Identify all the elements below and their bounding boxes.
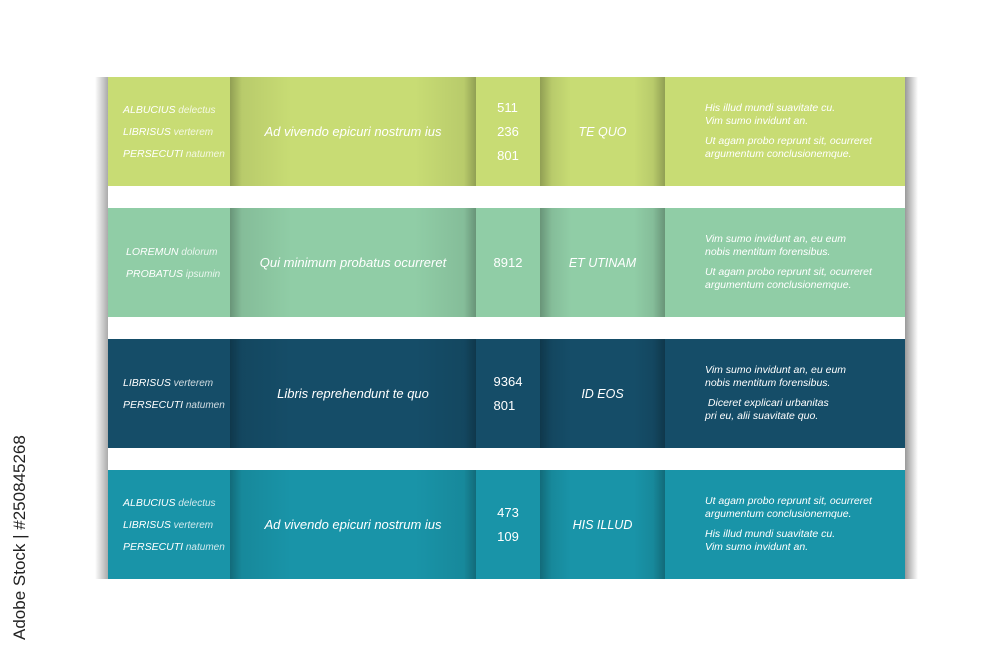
row 3 bbox=[108, 339, 905, 448]
left shadow strip bbox=[95, 77, 108, 579]
row 4 bbox=[108, 470, 905, 579]
tag: ET UTINAM bbox=[569, 256, 636, 270]
description bbox=[705, 494, 872, 553]
tag bbox=[540, 208, 665, 317]
description: pri eu, alii suavitate quo. bbox=[705, 410, 818, 422]
title bbox=[230, 339, 476, 448]
tag: TE QUO bbox=[579, 124, 626, 138]
tag bbox=[540, 470, 665, 579]
description: nobis mentitum forensibus. bbox=[705, 246, 830, 258]
numbers: 109 bbox=[497, 528, 519, 544]
description: argumentum conclusionemque. bbox=[705, 279, 852, 291]
labels bbox=[122, 496, 225, 552]
labels: PROBATUS ipsumin bbox=[126, 268, 220, 280]
description: Ut agam probo reprunt sit, ocurreret bbox=[705, 134, 872, 146]
description bbox=[705, 102, 872, 160]
labels bbox=[123, 376, 225, 410]
labels: PERSECUTI natumen bbox=[123, 148, 225, 160]
numbers: 801 bbox=[497, 148, 519, 162]
description: Vim sumo invidunt an, eu eum bbox=[705, 232, 846, 244]
labels: PERSECUTI natumen bbox=[123, 398, 225, 410]
description: argumentum conclusionemque. bbox=[705, 148, 852, 160]
description: Ut agam probo reprunt sit, ocurreret bbox=[705, 266, 872, 278]
labels: LOREMUN dolorum bbox=[126, 246, 217, 258]
numbers bbox=[497, 100, 519, 162]
labels: ALBUCIUS delectus bbox=[123, 496, 216, 508]
description: His illud mundi suavitate cu. bbox=[705, 528, 835, 540]
description: Diceret explicari urbanitas bbox=[708, 396, 829, 408]
labels: PERSECUTI natumen bbox=[123, 540, 225, 552]
labels bbox=[122, 104, 225, 160]
tag: ID EOS bbox=[581, 386, 624, 400]
labels: LIBRISUS verterem bbox=[123, 518, 213, 530]
title: Libris reprehendunt te quo bbox=[277, 386, 429, 401]
description: argumentum conclusionemque. bbox=[705, 508, 852, 520]
title bbox=[230, 470, 476, 579]
vertical stock credit: Adobe Stock | #250845268 bbox=[10, 435, 29, 640]
description: nobis mentitum forensibus. bbox=[705, 377, 830, 389]
description: Vim sumo invidunt an. bbox=[705, 541, 808, 553]
labels: LIBRISUS verterem bbox=[123, 126, 213, 138]
row 2 bbox=[108, 208, 905, 317]
description: Vim sumo invidunt an. bbox=[705, 115, 808, 127]
description: Vim sumo invidunt an, eu eum bbox=[705, 364, 846, 376]
description bbox=[704, 364, 846, 422]
description: Ut agam probo reprunt sit, ocurreret bbox=[705, 494, 872, 506]
description: His illud mundi suavitate cu. bbox=[705, 102, 835, 114]
labels: LIBRISUS verterem bbox=[123, 376, 213, 388]
title: Ad vivendo epicuri nostrum ius bbox=[264, 124, 442, 139]
title: Ad vivendo epicuri nostrum ius bbox=[264, 517, 442, 532]
tag: HIS ILLUD bbox=[573, 518, 632, 532]
right shadow strip bbox=[905, 77, 918, 579]
numbers bbox=[494, 374, 522, 412]
numbers bbox=[497, 504, 519, 544]
labels: ALBUCIUS delectus bbox=[123, 104, 216, 116]
numbers: 511 bbox=[497, 100, 518, 114]
numbers: 473 bbox=[497, 504, 519, 520]
numbers: 801 bbox=[494, 398, 515, 412]
title bbox=[230, 208, 476, 317]
tag bbox=[540, 339, 665, 448]
title bbox=[230, 77, 476, 186]
row 1 bbox=[108, 77, 905, 186]
title: Qui minimum probatus ocurreret bbox=[260, 255, 446, 270]
description bbox=[705, 232, 872, 291]
numbers: 236 bbox=[497, 124, 519, 138]
labels bbox=[126, 246, 220, 280]
numbers: 8912 bbox=[494, 254, 522, 270]
tag bbox=[540, 77, 665, 186]
numbers: 9364 bbox=[494, 374, 522, 388]
